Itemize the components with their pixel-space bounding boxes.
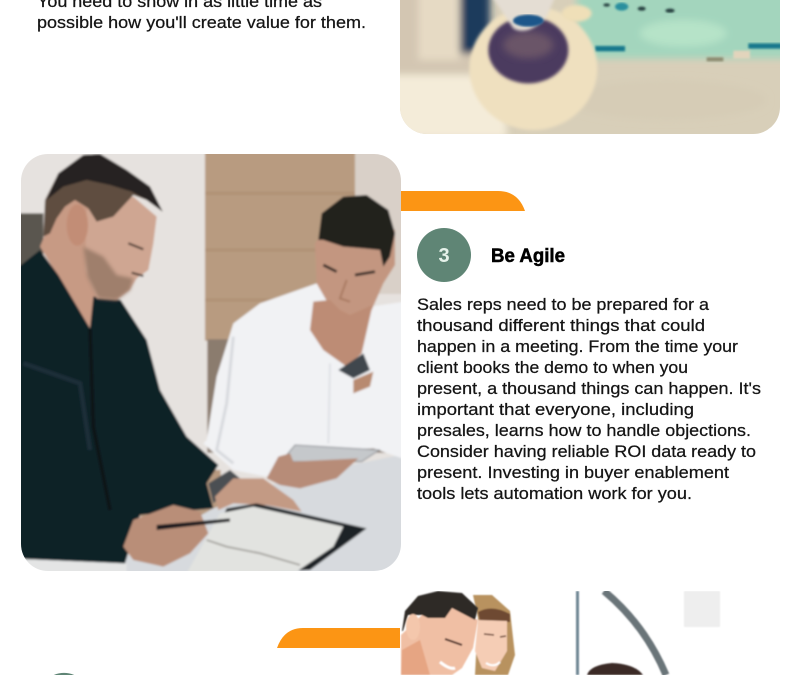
- text block: section 3 body: important that everyone, including: [417, 400, 694, 419]
- wood panel: [205, 143, 355, 341]
- man on left: face: [85, 197, 157, 300]
- man on left: ear: [67, 204, 88, 246]
- photo: blurred cup on desk: [400, 0, 780, 134]
- mirror frame: [576, 591, 720, 675]
- man on left: hair: [43, 154, 163, 237]
- tablet: [287, 445, 379, 462]
- orange tab: section 4: [277, 628, 400, 648]
- man on right: head: [315, 230, 396, 316]
- text block: section 3 body: thousand different things that could: [417, 316, 705, 335]
- man on left: hand holding pen: [123, 505, 208, 567]
- man on right: shirt: [203, 283, 417, 477]
- text block: section 3 body: happen in a meeting. From the time your: [417, 337, 738, 356]
- notebook: [224, 502, 367, 571]
- man on left: shirt: [7, 250, 218, 563]
- wall: [21, 154, 401, 556]
- orange tab: section 3: [401, 191, 525, 211]
- heading: Be Agile: Be Agile: [491, 246, 565, 267]
- number badge: 3: 3: [438, 245, 450, 267]
- number badge: 3: [417, 228, 471, 282]
- photo: two businessmen reviewing notes: [21, 154, 401, 571]
- number badge: 4 (cropped): [54, 673, 74, 675]
- text block: section 3 body: present. Investing in buyer enablement: [417, 463, 729, 482]
- man on right: hand on chin and watch: [310, 300, 373, 367]
- man on left: neck: [40, 190, 100, 328]
- text block: section 3 body: presales, learns how to handle objections.: [417, 421, 751, 440]
- text block: section 3 body: present, a thousand things can happen. It's: [417, 379, 761, 398]
- man: [401, 591, 478, 675]
- man on right: left hand: [267, 453, 358, 488]
- photo: couple looking down: [400, 591, 720, 675]
- table: [53, 456, 401, 571]
- woman: [473, 595, 515, 675]
- text block: section 3 body: Sales reps need to be prepared for a: [417, 295, 710, 314]
- text block: section 2 ending: [37, 0, 366, 32]
- man on left: watch and hand on notebook: [208, 470, 240, 503]
- sofa and floor: [206, 338, 386, 454]
- text block: section 2 ending: possible how you'll create value for them.: [37, 13, 366, 32]
- text block: section 3 body: [417, 295, 761, 503]
- text block: section 3 body: Consider having reliable ROI data ready to: [417, 442, 756, 461]
- text block: section 3 body: client books the demo to when you: [417, 358, 688, 377]
- text block: section 3 body: tools lets automation work for you.: [417, 484, 692, 503]
